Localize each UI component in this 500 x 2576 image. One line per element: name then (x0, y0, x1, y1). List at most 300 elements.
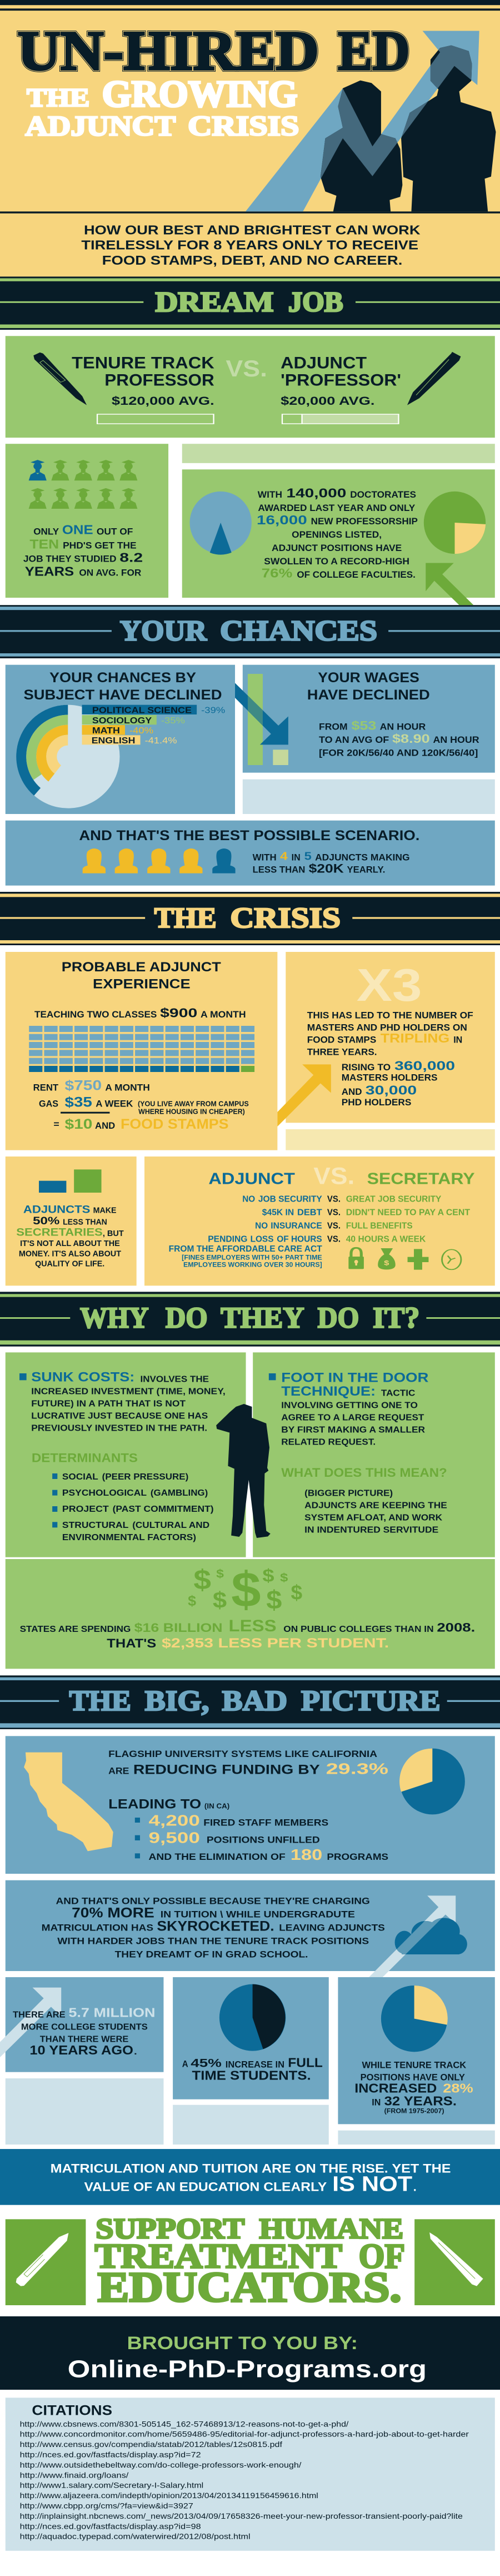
icon: money bag: $ (384, 1259, 389, 1267)
intro text (81, 224, 421, 268)
panel: state spending (6, 1559, 495, 1669)
panel: doctorates vs openings (182, 469, 495, 598)
sunk costs definition: PREVIOUSLY INVESTED IN THE PATH. (31, 1423, 207, 1433)
students text (13, 2006, 156, 2057)
spending text: $2,353 LESS PER STUDENT. (162, 1636, 389, 1651)
section heading top stripes: The Crisis (0, 892, 500, 912)
food stamps text (307, 1010, 473, 1108)
comparison rows: VS. (327, 1207, 341, 1217)
panel: tenure vs adjunct (6, 336, 495, 438)
section heading top stripes: Why (0, 1292, 500, 1312)
panel: one out of ten (6, 444, 168, 598)
doctorates text: ADJUNCT POSITIONS HAVE (272, 543, 402, 553)
teaching income text: A MONTH (201, 1009, 246, 1020)
support humane treatment text: TREATMENT (94, 2237, 342, 2276)
header section (0, 0, 500, 330)
section heading: Dream Job: DREAM (156, 286, 273, 318)
food stamps text: AND (342, 1086, 362, 1097)
wages text: HAVE DECLINED (307, 688, 430, 703)
title: Un-Hired Ed: UN-HIRED (18, 20, 319, 82)
arrow: rising (0, 1988, 61, 2057)
funding text: ARE (108, 1766, 129, 1776)
chart legend: -41.4% (145, 736, 177, 746)
food stamps text: TRIPLING (381, 1031, 449, 1045)
tenure track text: $120,000 AVG. (112, 394, 214, 408)
comparison rows: VS. (327, 1194, 341, 1204)
section heading: The Big, Bad Picture: BAD (222, 1685, 287, 1716)
closing sections (0, 2149, 500, 2311)
comparison text: MONEY. IT'S ALSO ABOUT (19, 1249, 121, 1258)
citation list: http://www1.salary.com/Secretary-I-Salary.html (20, 2481, 203, 2490)
icon: dollar signs: $ (280, 1571, 288, 1584)
why do they do it panels (0, 1301, 500, 1557)
panel: wages declined (235, 665, 495, 773)
doctorates text (257, 486, 418, 580)
chart legend (82, 705, 225, 746)
section heading: Why Do They Do It (0, 1301, 500, 1347)
section heading: Your Chances (0, 605, 500, 647)
title: Un-Hired Ed: UN-HIRED (18, 20, 319, 82)
doctorates text: NEW PROFESSORSHIP (311, 516, 418, 527)
tuition and enrollment panels (0, 1880, 495, 2145)
chart legend: -39% (201, 705, 225, 715)
section heading: Dream Job: JOB (288, 286, 343, 318)
icon: graduates pictogram (29, 460, 137, 509)
one out of ten text: YEARS (25, 565, 74, 579)
expenses text: RENT (33, 1082, 59, 1093)
section heading: Why Do They Do It: DO (166, 1302, 208, 1334)
foot in the door definition: INVOLVING GETTING ONE TO (281, 1400, 418, 1410)
citation list: http://nces.ed.gov/fastfacts/display.asp?id=72 (20, 2450, 201, 2459)
comparison rows: FULL BENEFITS (346, 1220, 413, 1230)
arrow and silhouettes illustration (246, 31, 496, 211)
panel: more students (0, 1977, 163, 2072)
citation list: http://nces.ed.gov/fastfacts/display.asp?id=98 (20, 2522, 201, 2531)
determinants list: SOCIAL (62, 1472, 98, 1482)
comparison rows: JOB SECURITY (258, 1194, 322, 1204)
four in five text: WITH (253, 852, 277, 862)
citation list: http://www.aljazeera.com/indepth/opinion/2013/04/20134119156459616.html (20, 2491, 318, 2500)
leading to list: 180 (291, 1846, 322, 1863)
comparison rows: LOSS (251, 1234, 273, 1244)
one out of ten text: TEN (29, 537, 59, 552)
tenure text: INCREASED (354, 2081, 437, 2095)
comparison heading (208, 1162, 475, 1189)
one out of ten text: JOB THEY STUDIED (23, 554, 117, 564)
arrow: green upward (426, 563, 473, 605)
wages text (307, 671, 479, 758)
tenure track text (72, 354, 214, 408)
banner: value of education: IS NOT (332, 2172, 412, 2196)
leading to list: 9,500 (148, 1829, 200, 1847)
salary bar: adjunct (282, 414, 398, 424)
icon: clock (442, 1249, 461, 1269)
doctorates text: 140,000 (286, 486, 346, 500)
panel: food stamps tripling (286, 952, 495, 1123)
teaching income text (34, 1005, 246, 1020)
four in five text: 4 (280, 850, 288, 863)
doctorates text: WITH (258, 489, 282, 500)
icon: adjunct pictogram (83, 848, 236, 873)
icon: California map (24, 1753, 113, 1851)
sunk costs definition: SUNK COSTS: (31, 1369, 134, 1384)
students text: 5.7 MILLION (68, 2006, 156, 2020)
intro text: FOOD STAMPS, DEBT, AND NO CAREER. (102, 254, 402, 268)
students text: 10 YEARS AGO (29, 2043, 133, 2057)
versus label: VS. (226, 355, 267, 381)
four in five text: IN (292, 852, 301, 862)
tenure text: IN (372, 2097, 381, 2107)
heading: EXPERIENCE (93, 977, 191, 991)
accent block (6, 2078, 163, 2145)
leading to list: (IN CA) (204, 1802, 229, 1810)
expenses text: $10 (65, 1116, 92, 1132)
section heading bottom stripes (0, 645, 500, 658)
X3 multiplier: X3 (357, 959, 422, 1011)
icon: white pencil panel (414, 2219, 495, 2305)
title: Un-Hired Ed: UN-HIRED (18, 20, 319, 82)
banner: value of education: VALUE OF AN EDUCATION CLEARLY (84, 2180, 327, 2194)
wages text: TO AN AVG OF (319, 734, 389, 745)
leading to list: AND THE ELIMINATION OF (148, 1852, 286, 1862)
citation list: http://www.finaid.org/loans/ (20, 2471, 129, 2480)
section heading: Your Chances: YOUR (120, 614, 207, 647)
budget waffle chart (29, 1026, 254, 1072)
comparison heading: ADJUNCT (208, 1169, 295, 1188)
pie chart: 28 percent (381, 1986, 448, 2052)
food stamps text: PHD HOLDERS (342, 1097, 411, 1108)
leading to list: LEADING TO (108, 1796, 201, 1811)
heading: YOUR CHANCES BY (49, 671, 196, 686)
comparison rows: NO (255, 1220, 268, 1230)
determinants list: (CULTURAL AND (132, 1520, 209, 1530)
chart legend: ENGLISH (92, 736, 135, 746)
comparison rows: VS. (327, 1220, 341, 1230)
heading: SUBJECT HAVE DECLINED (23, 688, 222, 703)
tenure text: 28% (443, 2081, 473, 2095)
full time text: INCREASE IN (226, 2059, 284, 2069)
comparison rows: NO (242, 1194, 255, 1204)
comparison text: , BUT (103, 1229, 124, 1238)
students text: THAN THERE WERE (40, 2034, 128, 2044)
four in five text: YEARLY. (347, 864, 385, 875)
tenure text: (FROM 1975-2007) (384, 2107, 444, 2115)
section heading: Why Do They Do It: WHY (80, 1302, 148, 1334)
food stamps text: IN (453, 1034, 462, 1045)
support humane treatment text: SUPPORT (96, 2213, 244, 2245)
panel: citations (6, 2398, 495, 2551)
spending text: THAT'S (107, 1636, 156, 1650)
tenure track text: PROFESSOR (104, 371, 214, 389)
silhouette: man (216, 1404, 271, 1538)
comparison text: LESS THAN (63, 1218, 107, 1227)
accent block (338, 2131, 495, 2145)
panel: chances by subject (6, 665, 235, 814)
banner: value of education: . (413, 2180, 417, 2194)
comparison rows: FROM THE AFFORDABLE CARE ACT (169, 1244, 322, 1254)
tenure track text: TENURE TRACK (72, 354, 214, 372)
one out of ten text: ON AVG. FOR (79, 568, 141, 578)
sunk costs definition: INCREASED INVESTMENT (TIME, MONEY, (31, 1386, 226, 1396)
heading: PROBABLE ADJUNCT (62, 960, 221, 975)
chart legend: SOCIOLOGY (92, 716, 152, 726)
determinants list: (PAST COMMITMENT) (113, 1504, 214, 1514)
icon: medical cross (408, 1249, 428, 1270)
panel: tenure track growth (338, 1977, 495, 2124)
determinants list: (GAMBLING) (151, 1488, 208, 1498)
full time text (182, 2055, 323, 2083)
full time text: 45% (191, 2057, 222, 2070)
adjunct text: $20,000 AVG. (281, 394, 374, 408)
icon: dollar signs: $ (193, 1565, 211, 1595)
adjunct text: ADJUNCT (281, 354, 367, 372)
section heading: Your Chances: CHANCES (220, 614, 377, 647)
state spending and big picture (0, 1559, 500, 1874)
expenses text: $35 (65, 1094, 92, 1110)
expenses text: A MONTH (105, 1082, 150, 1093)
accent block (286, 1129, 495, 1150)
pie chart: adjunct share (424, 492, 486, 554)
icon: white pen panel (6, 2219, 86, 2305)
citation list (20, 2420, 469, 2541)
icon: dollar signs: $ (213, 1587, 227, 1613)
heading (23, 671, 222, 703)
footer: brought to you by: BROUGHT TO YOU BY: (127, 2333, 358, 2353)
comparison heading: VS. (313, 1162, 354, 1189)
doctorates text: DOCTORATES (350, 489, 416, 500)
title: Un-Hired Ed: ED (338, 20, 410, 82)
support humane treatment text (94, 2213, 405, 2311)
section heading: The Crisis: THE (154, 902, 217, 934)
tuition text: 70% MORE (72, 1905, 154, 1920)
spending text: LESS (229, 1616, 277, 1635)
icon: money stacks (39, 1169, 102, 1193)
one out of ten text: PHD'S GET THE (63, 540, 137, 550)
spending text: STATES ARE SPENDING (20, 1624, 131, 1634)
tuition text: MATRICULATION HAS (42, 1922, 153, 1933)
intro text: TIRELESSLY FOR 8 YEARS ONLY TO RECEIVE (81, 239, 418, 252)
icon: dollar signs: $ (231, 1561, 261, 1617)
subtitle: The Growing Adjunct Crisis: THE (27, 83, 89, 112)
citation list: http://www.census.gov/compendia/statab/2012/tables/12s0815.pdf (20, 2440, 282, 2449)
spending text: 2008. (437, 1620, 475, 1634)
leading to list: 4,200 (148, 1811, 200, 1829)
comparison text: IT'S NOT ALL ABOUT THE (20, 1239, 120, 1248)
sunk costs definition: INVOLVES THE (141, 1374, 209, 1384)
determinants list: DETERMINANTS (32, 1451, 138, 1465)
four in five text: ADJUNCTS MAKING (315, 852, 410, 862)
subtitle: The Growing Adjunct Crisis: GROWING (102, 73, 298, 115)
expenses text: AND (95, 1120, 115, 1131)
leading to list (108, 1796, 388, 1863)
wages text: FROM (319, 722, 348, 732)
full time text: FULL (288, 2055, 323, 2070)
comparison rows: PENDING (208, 1234, 247, 1244)
expenses text: (YOU LIVE AWAY FROM CAMPUS (138, 1099, 249, 1108)
crisis panels (0, 901, 500, 1150)
determinants list: STRUCTURAL (62, 1520, 129, 1530)
arrow: gold upward (277, 1064, 331, 1126)
accent block (173, 2105, 329, 2145)
wages text: AN HOUR (380, 722, 426, 732)
title: Un-Hired Ed: ED (338, 20, 410, 82)
one out of ten text: 8.2 (119, 551, 143, 565)
icon: pen (33, 353, 87, 405)
leading to list: PROGRAMS (327, 1852, 388, 1862)
citation list: http://www.cbpp.org/cms/?fa=view&id=3927 (20, 2501, 193, 2510)
comparison text: QUALITY OF LIFE. (35, 1259, 104, 1268)
determinants list: PROJECT (62, 1504, 109, 1514)
icon: dollar signs: $ (291, 1581, 302, 1604)
funding text: 29.3% (326, 1760, 388, 1778)
panel: california cuts (6, 1736, 495, 1874)
comparison rows: VS. (327, 1234, 341, 1244)
icon: dollar signs (188, 1561, 302, 1617)
funding text: REDUCING FUNDING BY (133, 1762, 320, 1777)
wages text: $8.90 (392, 732, 430, 746)
teaching income text: TEACHING TWO CLASSES (34, 1009, 157, 1020)
section heading: Why Do They Do It: IT? (373, 1302, 419, 1334)
banner: value of education (0, 2149, 500, 2205)
determinants list (32, 1451, 214, 1542)
heading (62, 960, 221, 991)
food stamps text: 360,000 (394, 1058, 455, 1073)
sunk costs definition (19, 1369, 226, 1433)
footer: brought to you by (0, 2316, 500, 2390)
citation list: http://www.outsidethebeltway.com/do-college-professors-work-enough/ (20, 2461, 302, 2470)
comparison text: ADJUNCTS (23, 1203, 90, 1215)
food stamps text: THREE YEARS. (307, 1046, 377, 1057)
icon: dollar signs: $ (266, 1585, 282, 1615)
teaching income text: $900 (160, 1005, 197, 1020)
foot in the door definition (269, 1370, 428, 1447)
section heading: The Big, Bad Picture: BIG, (145, 1685, 209, 1716)
panel: sunk costs (6, 1352, 246, 1557)
adjunct vs secretary row (0, 1157, 500, 1312)
foot in the door definition: RELATED REQUEST. (281, 1437, 376, 1447)
food stamps text: FOOD STAMPS (307, 1034, 376, 1045)
pie chart: funding cut (399, 1749, 465, 1814)
four in five text: $20K (309, 861, 344, 875)
doctorates text: OPENINGS LISTED, (292, 529, 382, 540)
radial chart (16, 705, 120, 808)
pie chart: 45 percent (219, 1984, 286, 2051)
panel: tuition increase (6, 1880, 495, 1971)
comparison text: SECRETARIES (16, 1226, 103, 1238)
subtitle: The Growing Adjunct Crisis: CRISIS (188, 111, 299, 142)
intro text: HOW OUR BEST AND BRIGHTEST CAN WORK (84, 224, 421, 237)
title: Un-Hired Ed: ED (338, 20, 410, 82)
one out of ten text (23, 523, 143, 579)
foot in the door definition: TECHNIQUE: (281, 1384, 376, 1399)
expenses text (33, 1078, 249, 1132)
leading to list: POSITIONS UNFILLED (207, 1834, 320, 1845)
section heading: The Big, Bad Picture (0, 1675, 500, 1729)
dream job panels (0, 336, 500, 647)
panel: foot in the door (253, 1352, 495, 1557)
comparison rows: INSURANCE (271, 1220, 322, 1230)
determinants list: ENVIRONMENTAL FACTORS) (62, 1532, 196, 1542)
section heading: Why Do They Do It: DO (318, 1302, 359, 1334)
students text: . (134, 2047, 137, 2057)
subtitle: The Growing Adjunct Crisis: ADJUNCT (25, 111, 176, 142)
tuition text (42, 1895, 385, 1959)
icon: dollar signs: $ (216, 1567, 224, 1581)
one out of ten text: ONLY (33, 526, 59, 537)
accent block (243, 780, 495, 814)
icon: dollar signs: $ (188, 1593, 196, 1609)
foot in the door definition: TACTIC (381, 1388, 415, 1398)
comparison rows: OF HOURS (277, 1234, 322, 1244)
call to action (6, 2213, 495, 2311)
adjunct text: 'PROFESSOR' (281, 371, 401, 389)
food stamps text: MASTERS HOLDERS (342, 1073, 438, 1083)
what does this mean (281, 1466, 447, 1535)
subtitle: The Growing Adjunct Crisis (25, 73, 299, 142)
doctorates text: 16,000 (257, 513, 307, 527)
arrow: rising over cloud (369, 1895, 467, 1977)
icon: lock (348, 1248, 364, 1269)
full time text: TIME STUDENTS. (192, 2068, 311, 2083)
leading to list: FIRED STAFF MEMBERS (203, 1817, 328, 1828)
expenses text: = (53, 1119, 59, 1129)
panel: adjunct vs secretary (144, 1157, 495, 1285)
section heading: The Crisis (0, 901, 500, 945)
support humane treatment text: HUMANE (259, 2213, 403, 2245)
pie chart: new openings (190, 492, 252, 554)
icon: pencil (407, 352, 461, 405)
food stamps text: RISING TO (342, 1062, 391, 1073)
sunk costs definition: FUTURE) IN A PATH THAT IS NOT (31, 1398, 186, 1408)
tenure text: 32 YEARS. (384, 2093, 457, 2108)
doctorates text: AWARDED LAST YEAR AND ONLY (258, 503, 416, 513)
accent strip (182, 444, 495, 463)
panel: money comparison (6, 1157, 137, 1285)
tenure text (354, 2059, 473, 2115)
chart legend: POLITICAL SCIENCE (92, 705, 192, 715)
what does this mean: (BIGGER PICTURE) (304, 1488, 393, 1498)
one out of ten text: OUT OF (97, 526, 133, 537)
one out of ten text: ONE (62, 523, 93, 537)
tuition text: THEY DREAMT OF IN GRAD SCHOOL. (115, 1949, 308, 1959)
comparison text: MAKE (93, 1206, 117, 1215)
determinants list: (PEER PRESSURE) (102, 1472, 188, 1482)
section heading: The Crisis: CRISIS (230, 902, 341, 934)
panel: citations: CITATIONS (32, 2403, 112, 2418)
panel: full time students (173, 1977, 329, 2099)
comparison rows: [FINES EMPLOYERS WITH 50+ PART TIME (182, 1254, 322, 1262)
citation list: http://aquadoc.typepad.com/waterwired/2012/08/post.html (20, 2533, 251, 2541)
icon: money bag (378, 1248, 396, 1269)
tuition text: IN TUITION \ WHILE UNDERGRADUTE (161, 1909, 355, 1919)
expenses text: $750 (65, 1078, 102, 1093)
section heading: The Big, Bad Picture: THE (69, 1685, 131, 1716)
icon: dollar signs: $ (262, 1565, 274, 1586)
comparison rows: $45K IN (262, 1207, 294, 1217)
four in five text: 5 (304, 850, 312, 863)
chart legend: -40% (129, 726, 153, 736)
tuition text: LEAVING ADJUNCTS (279, 1922, 385, 1933)
wages text: YOUR WAGES (318, 671, 419, 686)
doctorates text: 76% (262, 566, 292, 580)
funding text (108, 1749, 388, 1778)
spending text: $16 BILLION (134, 1621, 223, 1635)
tuition text: SKYROCKETED. (157, 1919, 274, 1934)
salary bar: tenure (97, 414, 214, 424)
spending text (20, 1616, 475, 1651)
wages text: $53 (352, 719, 376, 733)
support humane treatment text: OF (359, 2237, 405, 2276)
